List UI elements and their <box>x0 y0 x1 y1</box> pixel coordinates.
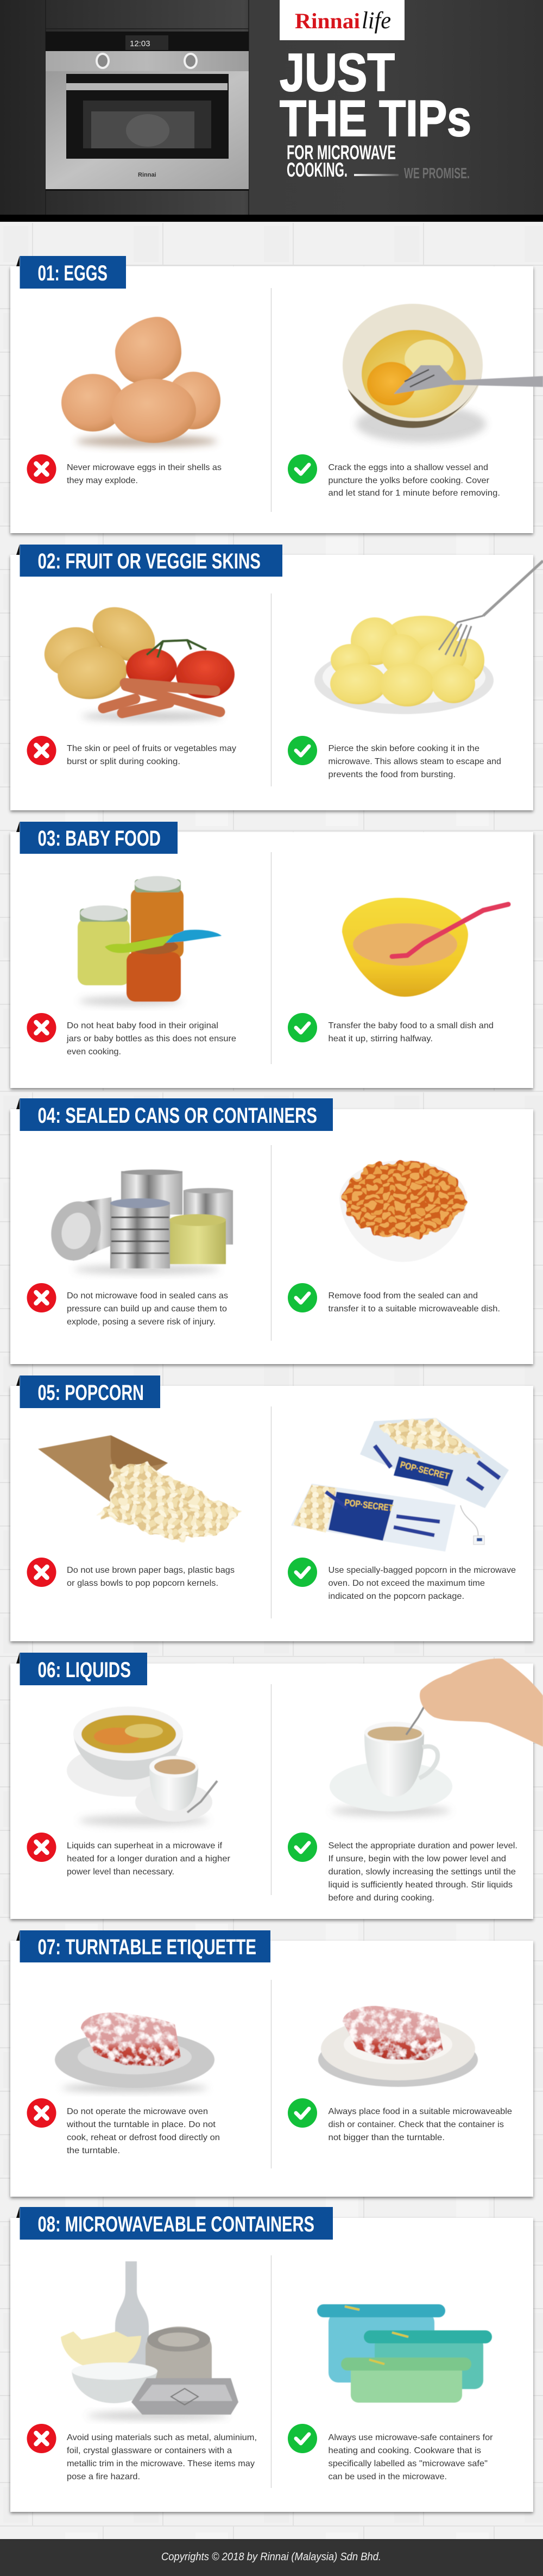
image: metal cans <box>45 1170 233 1274</box>
image: microwave popcorn bags: POP·SECRET <box>344 1497 394 1514</box>
image: microwave-safe plastic containers <box>317 2304 492 2403</box>
text: do: not bigger than the turntable. <box>328 2133 445 2142</box>
heading <box>20 2207 333 2240</box>
icon: built-in oven: 12:03 <box>130 39 150 48</box>
heading <box>20 256 126 289</box>
text: do not: burst or split during cooking. <box>67 757 180 766</box>
text: do not: foil, crystal glassware or containers with a <box>67 2446 232 2455</box>
text: do: heating and cooking. Cookware that is <box>328 2446 481 2455</box>
heading <box>20 1098 333 1131</box>
text: do <box>328 2107 512 2142</box>
text: do not <box>67 744 236 766</box>
image: soup bowl and coffee cup <box>67 1706 217 1826</box>
icon: cross <box>27 2424 56 2453</box>
text: do: specifically labelled as "microwave safe" <box>328 2459 488 2468</box>
logo: Rinnai life <box>280 0 405 40</box>
text: do not: Avoid using materials such as metal, aluminium, <box>67 2433 257 2442</box>
text: do not: pose a fire hazard. <box>67 2472 140 2481</box>
title <box>280 42 471 147</box>
text: do not: power level than necessary. <box>67 1867 174 1877</box>
panel: 01 eggs <box>10 256 543 533</box>
image: microwave popcorn bags: POP·SECRET <box>399 1459 450 1481</box>
text: do not: without the turntable in place. Do not <box>66 2120 216 2129</box>
text: do: before and during cooking. <box>328 1893 434 1903</box>
text: do not <box>67 2433 257 2481</box>
text: do: Pierce the skin before cooking it in the <box>328 744 479 753</box>
panel: 04 sealed cans or containers <box>10 1098 533 1364</box>
text: do: indicated on the popcorn package. <box>328 1592 464 1601</box>
text: do <box>328 463 500 498</box>
text: do not: or glass bowls to pop popcorn kernels. <box>67 1579 218 1588</box>
panel: 08 microwaveable containers <box>10 2207 533 2512</box>
text: do: Transfer the baby food to a small dish and <box>328 1021 494 1030</box>
image: peeled potatoes on plate with fork <box>314 561 543 714</box>
text: do not: Do not heat baby food in their original <box>67 1021 218 1030</box>
icon: check <box>288 1833 317 1862</box>
text: do not <box>67 1566 235 1588</box>
text: do not: they may explode. <box>67 476 138 485</box>
text: do: dish or container. Check that the container is <box>328 2120 504 2129</box>
image: baby food jars and spoons <box>78 876 222 1005</box>
logo: Rinnai life: Rinnai <box>295 9 360 33</box>
heading <box>20 1930 270 1962</box>
image: frozen meat on dish on turntable <box>318 2006 478 2087</box>
text: do not: pressure can build up and cause them to <box>67 1304 227 1314</box>
text: do: prevents the food from bursting. <box>328 770 456 779</box>
text: do <box>328 1021 494 1043</box>
heading: 07: TURNTABLE ETIQUETTE <box>38 1935 256 1959</box>
text: do not <box>67 463 222 485</box>
icon: cross <box>27 736 56 765</box>
icon: cross <box>27 1283 56 1312</box>
text: do: transfer it to a suitable microwaveable dish. <box>328 1304 500 1314</box>
image: stirring a cup on a saucer <box>330 1659 543 1816</box>
text: do not: metallic trim in the microwave. These items may <box>67 2459 255 2468</box>
text: do: Remove food from the sealed can and <box>328 1291 478 1300</box>
text: do: can be used in the microwave. <box>328 2472 447 2481</box>
text: do not: explode, posing a severe risk of injury. <box>67 1317 216 1327</box>
heading: 03: BABY FOOD <box>38 827 161 851</box>
icon: check <box>288 454 317 484</box>
icon: check <box>288 1558 317 1587</box>
text: do not: heated for a longer duration and a higher <box>67 1854 231 1864</box>
text: do: and let stand for 1 minute before removing. <box>328 489 500 498</box>
image: unsafe containers <box>61 2261 238 2419</box>
text: do <box>328 2433 493 2481</box>
text: do not: Do not use brown paper bags, plastic bags <box>67 1566 235 1575</box>
icon: built-in oven: Rinnai <box>138 172 156 178</box>
subtitle: WE PROMISE. <box>404 165 470 182</box>
text: do not: Never microwave eggs in their shells as <box>67 463 222 472</box>
image: cracked egg in bowl with fork <box>343 304 543 443</box>
icon: check <box>288 2424 317 2453</box>
heading: 04: SEALED CANS OR CONTAINERS <box>38 1104 317 1128</box>
text: do not <box>66 2107 220 2155</box>
text: do not <box>66 1021 236 1056</box>
text: do <box>328 1291 500 1314</box>
subtitle: FOR MICROWAVE <box>287 141 396 164</box>
heading <box>20 1375 160 1408</box>
heading: 08: MICROWAVEABLE CONTAINERS <box>38 2212 314 2236</box>
text: do: If unsure, begin with the low power level and <box>328 1854 506 1864</box>
text: do: puncture the yolks before cooking. Cover <box>328 476 490 485</box>
icon: cross <box>27 1558 56 1587</box>
icon: check <box>288 2098 317 2128</box>
image: microwave popcorn bags <box>291 1418 509 1552</box>
panel: 02 fruit or veggie skins <box>10 545 543 810</box>
heading: 05: POPCORN <box>38 1381 144 1405</box>
text: do not: Do not microwave food in sealed cans as <box>67 1291 228 1300</box>
icon: cross <box>27 454 56 484</box>
text: do not <box>67 1841 231 1877</box>
footer: Copyrights © 2018 by Rinnai (Malaysia) Sdn Bhd. <box>161 2551 381 2563</box>
icon: check <box>288 1283 317 1312</box>
title: JUST <box>280 42 395 102</box>
heading: 02: FRUIT OR VEGGIE SKINS <box>38 549 261 573</box>
footer <box>0 2539 543 2576</box>
icon: check <box>288 736 317 765</box>
text: do: Always place food in a suitable microwaveable <box>328 2107 512 2116</box>
logo: Rinnai life: life <box>362 7 391 34</box>
panel: 06 liquids <box>10 1653 543 1919</box>
text: do: Always use microwave-safe containers for <box>328 2433 493 2442</box>
text: do <box>328 1841 517 1903</box>
heading: 01: EGGS <box>38 261 108 285</box>
text: do not: even cooking. <box>67 1047 121 1056</box>
text: do not: Do not operate the microwave oven <box>67 2107 208 2116</box>
text: do not: cook, reheat or defrost food directly on <box>67 2133 220 2142</box>
text: do not: The skin or peel of fruits or vegetables may <box>67 744 236 753</box>
icon: cross <box>27 2098 56 2128</box>
image: potatoes, tomatoes, sausages <box>38 596 235 721</box>
icon: check <box>288 1013 317 1042</box>
header banner <box>0 0 543 222</box>
text: do: Crack the eggs into a shallow vessel and <box>328 463 488 472</box>
subtitle <box>287 141 470 182</box>
heading: 06: LIQUIDS <box>38 1658 131 1682</box>
text: do: oven. Do not exceed the maximum time <box>328 1579 485 1588</box>
panel: 05 popcorn <box>10 1375 533 1641</box>
text: do not: the turntable. <box>67 2146 120 2155</box>
heading <box>20 545 282 577</box>
subtitle: COOKING. <box>287 159 348 181</box>
text: do <box>328 744 501 779</box>
icon: cross <box>27 1833 56 1862</box>
image: frozen meat on turntable <box>55 2012 214 2092</box>
text: do: Use specially-bagged popcorn in the microwave <box>328 1566 516 1575</box>
image: baked beans in white bowl <box>339 1160 467 1262</box>
panel: 03 baby food <box>10 822 533 1088</box>
panel: 07 turntable etiquette <box>10 1930 533 2197</box>
title: THE TIPs <box>280 90 471 147</box>
text: do not: Liquids can superheat in a microwave if <box>67 1841 223 1850</box>
image: baby food in yellow bowl with pink spoon <box>342 898 508 997</box>
text: do not: jars or baby bottles as this does not ensure <box>66 1034 236 1043</box>
text: do: liquid is sufficiently heated through. Stir liquids <box>328 1880 513 1890</box>
text: do: heat it up, stirring halfway. <box>328 1034 433 1043</box>
icon: built-in oven <box>46 32 249 191</box>
text: do <box>328 1566 516 1601</box>
image: paper bag with spilled popcorn <box>38 1435 241 1541</box>
heading <box>20 1653 147 1685</box>
icon: cross <box>27 1013 56 1042</box>
text: do: Select the appropriate duration and power level. <box>328 1841 517 1850</box>
heading <box>20 822 178 854</box>
text: do: duration, slowly increasing the settings until the <box>328 1867 516 1877</box>
text: do not <box>67 1291 228 1327</box>
text: do: microwave. This allows steam to escape and <box>328 757 501 766</box>
image: pile of eggs <box>61 317 220 447</box>
